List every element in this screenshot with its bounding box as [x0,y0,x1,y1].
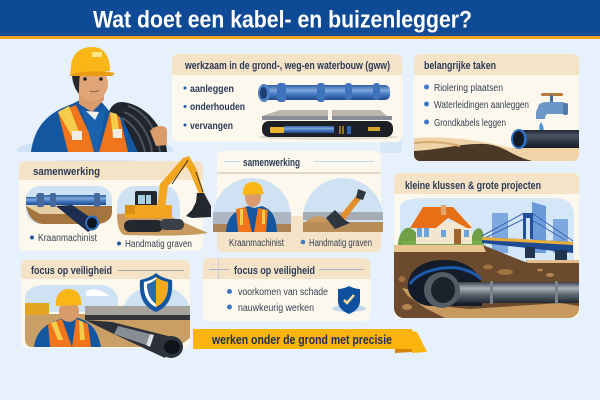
list: veiligheid: nauwkeurig werken [238,303,314,314]
heading: belangrijke taken [424,60,496,72]
illustration: ground layers [414,137,579,161]
illustration: pipes in trench [26,186,112,244]
illustration: sky and skyline [400,198,574,262]
label: Kraanmachinist [38,233,97,244]
heading: samenwerking [33,166,100,178]
heading: focus op veiligheid [234,265,315,277]
illustration: suspension bridge [482,213,573,260]
panel: samenwerking links [19,156,211,251]
ribbon: werken onder de grond met precisie: werken onder de grond met precisie [211,332,392,347]
list: aanleggen, onderhouden, vervangen: onderhouden [190,102,245,113]
heading: samenwerking [243,157,300,169]
panel: kleine klussen & grote projecten [394,173,579,318]
list: veiligheid [227,287,328,314]
icon: safety shield [140,273,172,312]
title: Wat doet een kabel- en buizenlegger? [93,6,472,34]
list: taken: Grondkabels leggen [434,118,506,129]
illustration: excavator [117,156,211,250]
panel: focus op veiligheid links [21,260,190,358]
icon: tap with drop [536,93,568,132]
list: aanleggen, onderhouden, vervangen [184,84,245,132]
illustration: large grey pipe [408,260,579,308]
illustration: worker on site [25,285,190,347]
icon: black pipe with end cap [85,320,183,358]
heading: focus op veiligheid [31,265,112,277]
panel: belangrijke taken [414,54,579,161]
heading: werkzaam in de grond-, weg-en waterbouw (gww) [184,60,390,72]
label: Kraanmachinist: Kraanmachinist [229,238,284,249]
list: aanleggen, onderhouden, vervangen: vervangen [190,121,233,132]
icon: blue pipe [258,83,390,102]
label: Handmatig graven: Handmatig graven [309,238,372,249]
ribbon: werken onder de grond met precisie [193,329,427,353]
panel: focus op veiligheid midden [203,258,370,321]
title banner [0,0,600,39]
icon: shield with check [332,286,366,314]
illustration: machinist worker [213,178,291,232]
illustration: worker with cable coil [0,47,200,162]
illustration: house [398,205,484,245]
list: veiligheid: voorkomen van schade [238,287,328,298]
list: aanleggen, onderhouden, vervangen: aanleggen [190,84,234,95]
illustration: shovel [303,178,383,232]
icon: cable trench cross-section [258,110,398,140]
heading: kleine klussen & grote projecten [405,180,541,192]
icon: black pipe [511,129,579,149]
list: taken [424,83,529,129]
panel: werkzaam in de grond-, weg- en waterbouw [172,54,402,153]
list: taken: Riolering plaatsen [434,83,503,94]
list: taken: Waterleidingen aanleggen [434,100,529,111]
illustration: soil cross-section [394,245,579,318]
panel: samenwerking midden [213,151,383,252]
label: Handmatig graven [301,238,372,249]
label: Handmatig graven [125,239,192,250]
